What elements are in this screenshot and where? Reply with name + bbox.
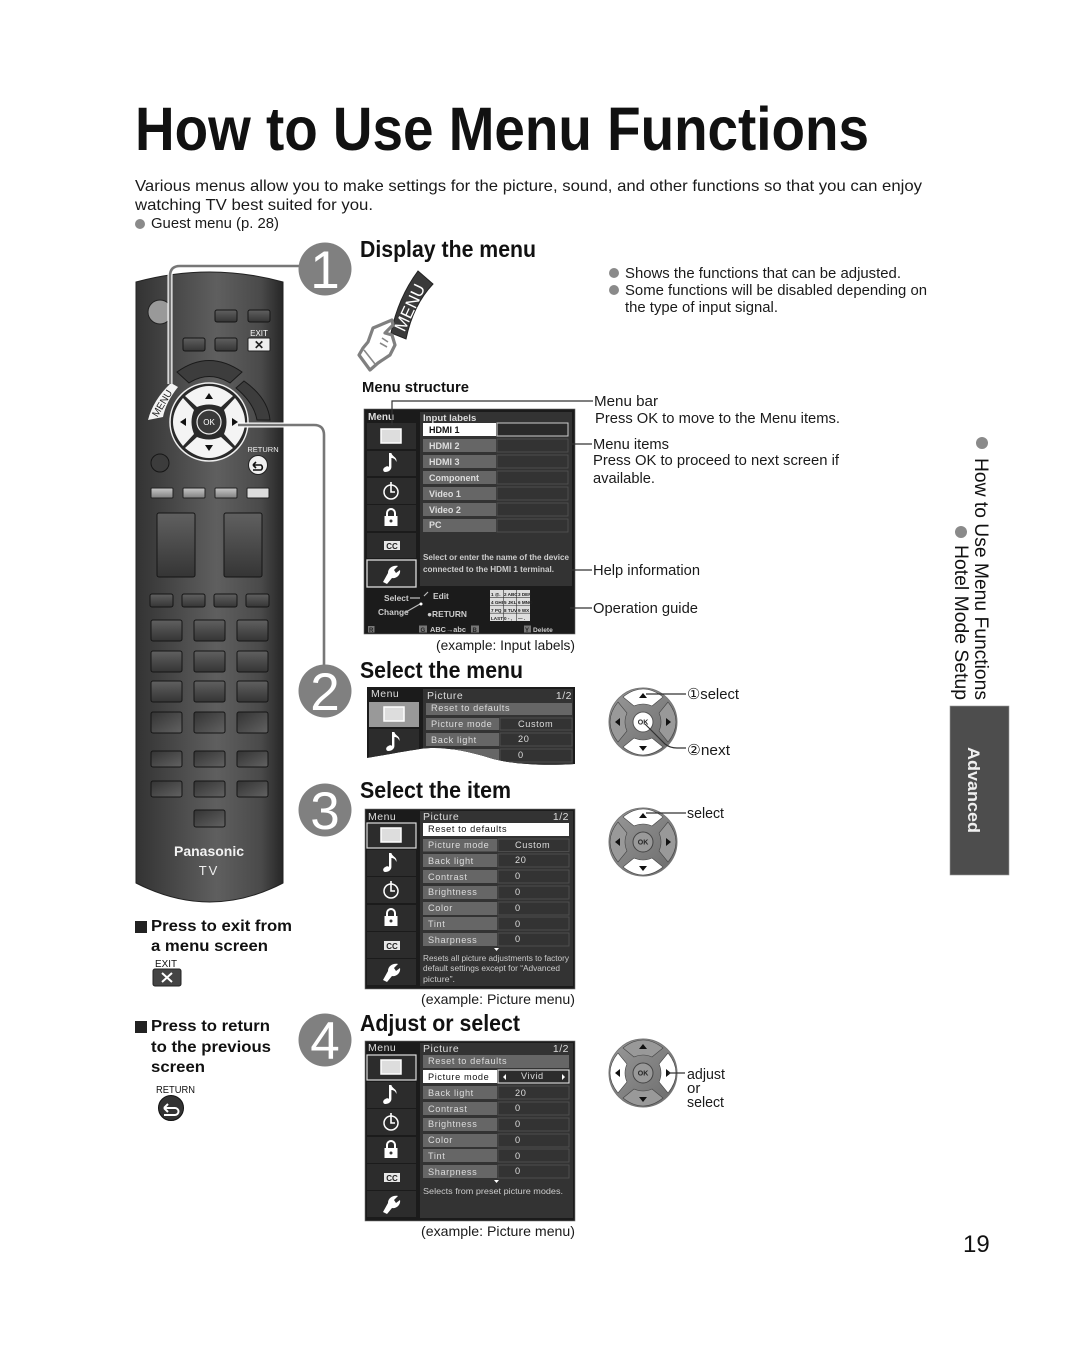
step number 1 [298,241,352,300]
panel: adjust or select screen: Menu [368,1042,396,1054]
panel: input labels menu screen: 4 GHI [491,600,503,605]
step number 3: 3 [310,782,340,841]
notes: display the menu: the type of input signal. [625,299,778,316]
panel: adjust or select screen: Contrast [428,1104,468,1114]
step number 4 [298,1012,352,1071]
callout: adjust or select: adjust [687,1066,726,1083]
panel: input labels menu screen: connected to the HDMI 1 terminal. [423,564,554,574]
note: guest menu: Guest menu (p. 28) [151,216,279,232]
remote control [136,272,283,902]
panel: adjust or select screen: 20 [515,1088,526,1098]
panel: adjust or select screen: Brightness [428,1119,477,1129]
panel: select the item screen: 1/2 [553,811,569,823]
panel: input labels menu screen: 5 JKL [504,600,517,605]
panel: input labels menu screen: Change [378,607,409,617]
step number 4: 4 [310,1012,340,1071]
panel: input labels menu screen: 7 PQ [491,608,502,613]
panel: select the item screen: Sharpness [428,935,477,945]
callout: menu items: Menu items [593,436,669,453]
caption: example picture menu (bottom): (example: Picture menu) [421,1223,575,1239]
note: press to return: Press to return [151,1018,270,1035]
panel: adjust or select screen: Tint [428,1151,445,1161]
heading: menu structure: Menu structure [362,380,469,396]
panel: select the menu screen: Menu [371,688,399,700]
panel: input labels menu screen: CC [386,542,398,551]
heading: display the menu: Display the menu [360,236,536,262]
side nav: section list: Hotel Mode Setup [950,545,971,700]
panel: select the menu screen: 0 [518,750,524,760]
callout: operation guide: Operation guide [593,600,698,617]
d-pad: adjust or select: OK [638,1070,648,1078]
panel: input labels menu screen: ABC→abc [430,627,466,634]
panel: input labels menu screen: Delete [533,627,553,634]
panel: adjust or select screen: 0 [515,1151,521,1161]
panel: input labels menu screen: Video 1 [429,489,461,499]
panel: input labels menu screen: PC [429,520,442,530]
panel: adjust or select screen: 1/2 [553,1043,569,1055]
heading: select the item: Select the item [360,777,511,803]
panel: input labels menu screen: R [369,628,374,634]
panel: input labels menu screen: 0 - , [504,616,512,621]
panel: adjust or select screen: 0 [515,1166,521,1176]
panel: select the menu screen [367,687,575,769]
callout: help information: Help information [593,562,700,579]
panel: input labels menu screen: HDMI 3 [429,457,460,467]
side tab: advanced: Advanced [964,747,983,833]
panel: select the item screen: 20 [515,855,526,865]
panel: select the item screen: Menu [368,811,396,823]
d-pad: select the menu [609,688,677,756]
callout: select and next [645,686,740,759]
heading: adjust or select: Adjust or select [360,1010,520,1036]
panel: input labels menu screen: Select [384,593,409,603]
intro text [134,178,922,214]
panel: select the menu screen: Reset to defaults [431,703,510,713]
panel: input labels menu screen: Menu [368,412,394,423]
remote control: MENU [151,388,175,419]
connector line: step 1 [170,266,300,384]
panel: input labels menu screen: 2 ABC [504,592,518,597]
callout: select: select [687,805,725,822]
panel: input labels menu screen: LAST [491,616,503,621]
note: press to exit: EXIT [155,959,177,970]
panel: select the menu screen: Back light [431,735,477,745]
panel: select the item screen: 0 [515,887,521,897]
panel: select the item screen: Picture [423,811,459,823]
callout: menu bar: Press OK to move to the Menu items. [595,410,840,427]
connector: step 1 to MENU button [170,266,300,384]
step number 2: 2 [310,663,340,722]
panel: input labels menu screen: 6 MNO [518,600,533,605]
callout: adjust or select [668,1066,726,1111]
panel: input labels menu screen: Video 2 [429,505,461,515]
panel: input labels menu screen: ●RETURN [427,609,467,619]
note: press to return: RETURN [156,1085,195,1096]
panel: adjust or select screen: Reset to defaults [428,1056,507,1066]
note: press to return [135,1018,271,1120]
panel: select the menu screen: Picture [427,690,463,702]
remote control: ✕ [254,338,264,352]
panel: select the item screen: CC [386,942,398,951]
panel: input labels menu screen: 3 DEF [518,592,531,597]
callout: select and next: ②next [687,742,731,759]
panel: select the menu screen: Custom [518,719,553,729]
notes: display the menu [609,265,927,316]
heading: select the menu: Select the menu [360,657,523,683]
panel: select the item screen: Resets all picture adjustments to factory [423,953,570,963]
note: press to return: screen [151,1059,205,1076]
d-pad: select the menu: OK [638,720,648,726]
connector line: step 2 [238,425,324,666]
remote control: Panasonic [174,843,244,859]
callout: adjust or select: or [687,1080,700,1097]
panel: adjust or select screen: Picture mode [428,1072,489,1082]
panel: select the item screen: Picture mode [428,840,489,850]
d-pad: select the item [609,808,677,876]
callout: menu items: Press OK to proceed to next screen if [593,452,840,469]
panel: select the menu screen: 20 [518,734,529,744]
step number 3 [298,782,352,841]
d-pad: select the item: OK [638,840,648,846]
panel: input labels menu screen: 9 WX [518,608,530,613]
panel: adjust or select screen: 0 [515,1119,521,1129]
panel: input labels menu screen: 1 @. [491,592,501,597]
panel: adjust or select screen: Back light [428,1088,474,1098]
remote control: RETURN [247,445,279,454]
notes: display the menu: Shows the functions that can be adjusted. [625,265,901,282]
panel: adjust or select screen: Selects from preset picture modes. [423,1186,563,1196]
note: press to return: to the previous [151,1039,271,1056]
panel: select the item screen: Reset to defaults [428,824,507,834]
panel: select the item screen: 0 [515,934,521,944]
panel: input labels menu screen [364,409,575,634]
panel: adjust or select screen: 0 [515,1103,521,1113]
icon: hand pressing MENU [359,271,433,370]
d-pad: adjust or select [609,1039,677,1107]
panel: input labels menu screen: Component [429,473,479,483]
panel: select the item screen: picture”. [423,974,455,984]
title: How to Use Menu Functions [135,95,869,163]
panel: adjust or select screen: Sharpness [428,1167,477,1177]
note: press to exit [135,918,292,986]
callout: adjust or select: select [687,1094,725,1111]
panel: adjust or select screen: CC [386,1174,398,1183]
panel: select the item screen: Custom [515,840,550,850]
page number: 19 [963,1231,990,1258]
callout: menu bar [392,393,840,427]
side nav: section list [950,437,991,700]
panel: input labels menu screen: Input labels [423,413,476,424]
panel: input labels menu screen: HDMI 1 [429,425,460,435]
panel: adjust or select screen: 0 [515,1135,521,1145]
note: press to exit: a menu screen [151,938,268,955]
callout: menu items: available. [593,470,655,487]
panel: input labels menu screen: Select or enter the name of the device [423,552,569,562]
panel: input labels menu screen: HDMI 2 [429,441,460,451]
side nav: section list: How to Use Menu Functions [970,458,991,700]
step number 1: 1 [310,241,340,300]
panel: select the item screen: 0 [515,903,521,913]
callout: menu bar: Menu bar [594,393,658,410]
panel: select the item screen [365,809,575,989]
panel: adjust or select screen [365,1041,575,1221]
caption: example input labels: (example: Input labels) [436,637,575,653]
caption: example picture menu: (example: Picture menu) [421,991,575,1007]
panel: input labels menu screen: G [420,628,426,634]
panel: input labels menu screen: B [472,628,478,634]
panel: select the item screen: Back light [428,856,474,866]
panel: select the item screen: Contrast [428,872,468,882]
panel: select the item screen: 0 [515,871,521,881]
panel: input labels menu screen: Y [525,628,529,634]
remote control: TV [199,863,219,878]
panel: select the menu screen: Picture mode [431,719,492,729]
panel: select the item screen: default settings except for “Advanced [423,963,560,973]
panel: input labels menu screen: 8 TUV [504,608,518,613]
icon: hand pressing MENU: MENU [391,281,429,334]
remote control: OK [203,418,215,427]
panel: input labels menu screen: — . [518,616,525,621]
intro text: watching TV best suited for you. [134,197,373,214]
panel: select the item screen: Tint [428,919,445,929]
callout: select [646,805,725,822]
callout: menu items [570,436,840,487]
notes: display the menu: Some functions will be disabled depending on [625,282,927,299]
remote control: EXIT [250,329,268,338]
panel: adjust or select screen: Picture [423,1043,459,1055]
panel: adjust or select screen: Color [428,1135,453,1145]
panel: input labels menu screen: Edit [433,591,449,601]
panel: select the item screen: Brightness [428,887,477,897]
panel: select the menu screen: 1/2 [556,690,572,702]
callout: select and next: ①select [687,686,740,703]
step number 2 [298,663,352,722]
intro text: Various menus allow you to make settings for the picture, sound, and other functions so that you can enjoy [135,178,922,195]
panel: select the item screen: 0 [515,919,521,929]
panel: adjust or select screen: Vivid [521,1071,544,1081]
side tab: advanced [950,706,1009,875]
note: press to exit: Press to exit from [151,918,292,935]
connector: step 2 to right arrow [238,425,324,666]
panel: select the item screen: Color [428,903,453,913]
